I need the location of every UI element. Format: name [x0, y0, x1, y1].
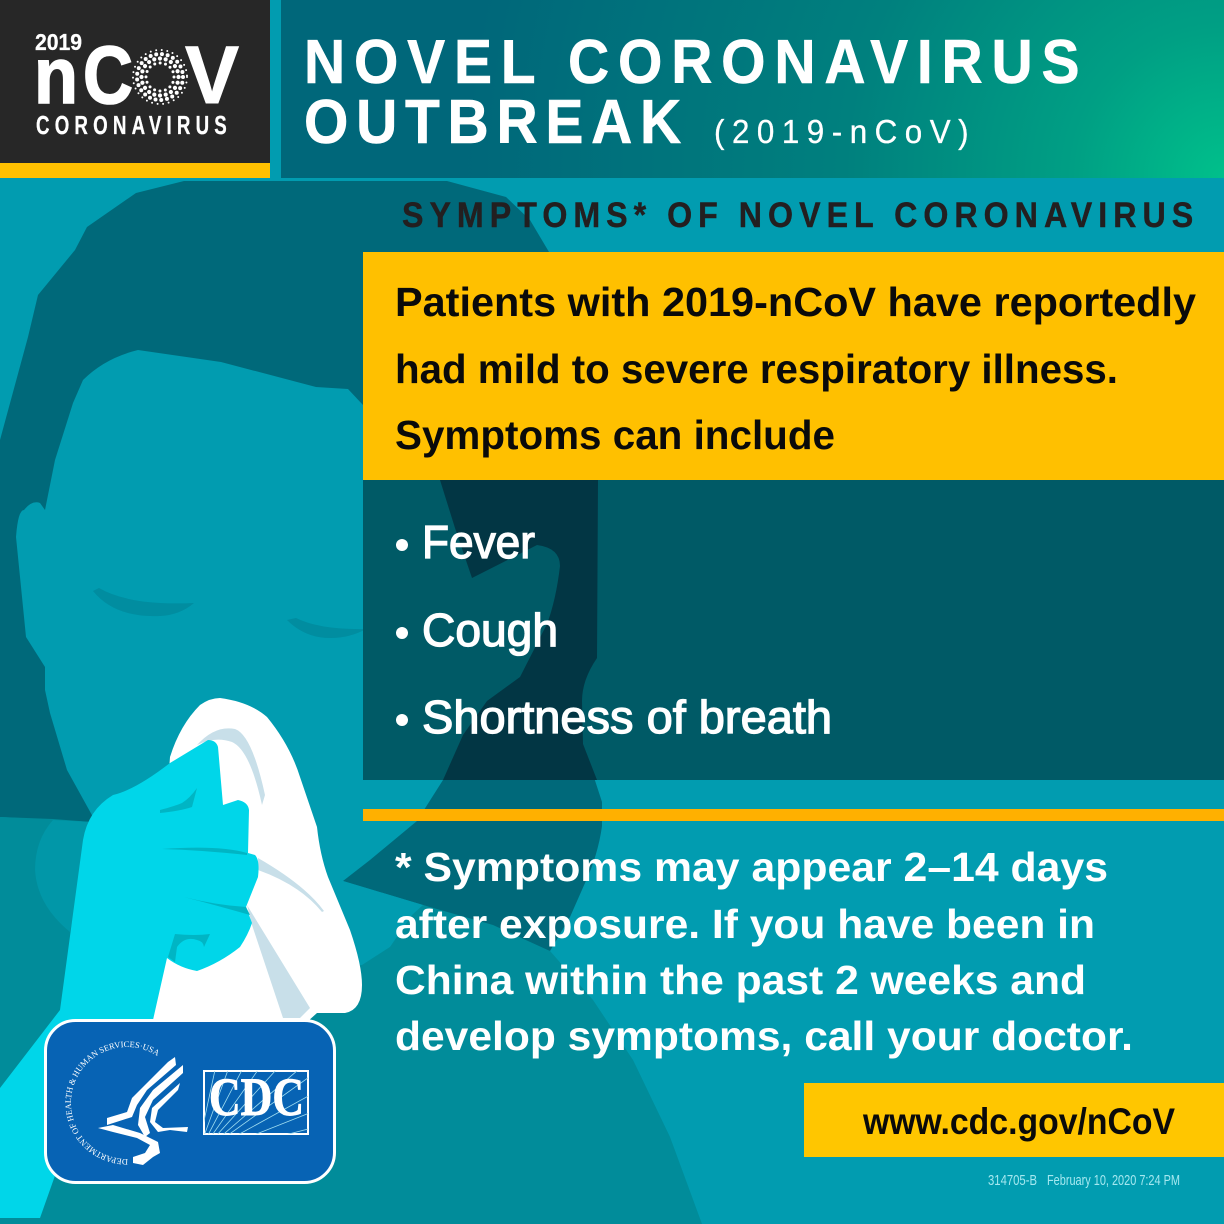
tissue	[150, 698, 362, 1022]
CDC logo	[203, 1070, 309, 1135]
text block: exposure note: develop symptoms, call your doctor.	[395, 1013, 1133, 1059]
text block: exposure note: * Symptoms may appear 2–14 days	[395, 844, 1108, 890]
logo virus dots	[133, 50, 187, 104]
title abbreviation: (2019-nCoV)	[714, 113, 969, 150]
title line 1: NOVEL CORONAVIRUS	[304, 27, 1080, 97]
left eye	[93, 588, 194, 616]
right eye	[287, 618, 366, 638]
text block: exposure note	[395, 844, 1133, 1059]
face	[16, 350, 560, 1000]
website callout: www.cdc.gov/nCoV	[862, 1101, 1175, 1142]
footer code and date	[988, 1172, 1180, 1189]
logo text: CORONAVIRUS	[36, 110, 227, 140]
panel: symptoms list	[363, 480, 1224, 780]
footer code and date: 314705-B	[988, 1172, 1037, 1189]
title line 2: OUTBREAK	[304, 87, 681, 157]
logo text	[34, 29, 239, 140]
body and neck	[0, 817, 702, 1224]
head silhouette inside panel	[440, 480, 598, 780]
section heading: SYMPTOMS* OF NOVEL CORONAVIRUS	[402, 197, 1193, 235]
logo text: 2019	[35, 29, 82, 55]
HHS seal text: DEPARTMENT OF HEALTH & HUMAN SERVICES·USA	[65, 1041, 158, 1165]
logo text: n	[34, 31, 78, 120]
header: logo block	[0, 0, 270, 178]
gloved hand	[0, 740, 259, 1218]
hair and head shadow	[0, 181, 602, 951]
badge: HHS and CDC logos	[44, 1019, 336, 1184]
bullet: shortness of breath: Shortness of breath	[422, 691, 832, 743]
website callout	[804, 1083, 1224, 1157]
chin shadow arc	[35, 820, 92, 932]
HHS eagle	[98, 1057, 188, 1165]
panel: symptoms intro: Patients with 2019-nCoV have reportedly	[395, 279, 1196, 325]
bullet: fever: Fever	[422, 516, 535, 568]
CDC logo: CDC	[209, 1067, 304, 1127]
panel: symptoms intro: had mild to severe respiratory illness.	[395, 346, 1118, 392]
text block: exposure note: after exposure. If you have been in	[395, 901, 1095, 947]
panel: symptoms intro: Symptoms can include	[395, 412, 835, 458]
panel: symptoms intro	[363, 252, 1224, 480]
divider rule	[363, 809, 1224, 821]
logo text: C	[83, 30, 133, 121]
logo text: V	[185, 30, 239, 121]
bullet: cough: Cough	[422, 604, 558, 656]
header: title banner	[281, 0, 1224, 178]
tissue folds	[197, 728, 324, 1018]
glove creases	[160, 788, 250, 962]
illustration: person sneezing	[0, 181, 702, 1224]
text block: exposure note: China within the past 2 weeks and	[395, 957, 1086, 1003]
